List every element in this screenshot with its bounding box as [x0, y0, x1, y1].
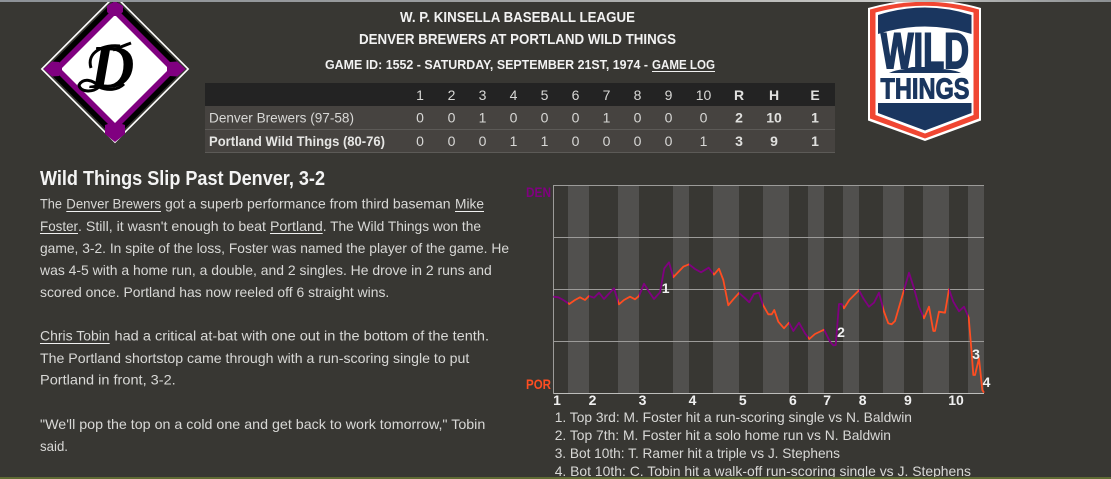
- inning axis labels: 7: [823, 392, 831, 408]
- row: Portland: [209, 133, 819, 149]
- team label: POR: POR: [526, 376, 551, 392]
- header row: 5: [541, 87, 549, 103]
- header row: 4: [510, 87, 518, 103]
- key play markers: 1: [662, 280, 670, 296]
- inning axis labels: 5: [739, 392, 747, 408]
- row: Denver: 0: [665, 110, 673, 126]
- header: matchup: DENVER BREWERS AT PORTLAND WILD THINGS: [359, 32, 676, 48]
- article paragraph 2: had a critical at-bat with one out in the bottom of the tenth.: [114, 328, 489, 344]
- row: Denver: 0: [700, 110, 708, 126]
- row: Portland: 1: [700, 133, 708, 149]
- inning axis labels: 10: [948, 392, 964, 408]
- background grass strip: bottom: [0, 477, 1111, 479]
- win probability line: Denver batting: [553, 262, 984, 393]
- things wordmark: THINGS: [880, 74, 970, 106]
- row: Portland: 9: [770, 133, 778, 149]
- background photo strip: top: [0, 0, 1111, 2]
- article paragraph 1: . The Wild Things won the: [323, 218, 481, 234]
- row: Portland: 0: [448, 133, 456, 149]
- article paragraph 3: said.: [40, 438, 68, 454]
- key plays list: 3. Bot 10th: T. Ramer hit a triple vs J. Stephens: [555, 445, 840, 461]
- article paragraph 2: Portland in front, 3-2.: [40, 372, 176, 388]
- inning axis labels: 6: [789, 392, 797, 408]
- header row: 9: [665, 87, 673, 103]
- header: game id line: GAME LOG: [652, 57, 715, 72]
- key play markers: [662, 280, 991, 390]
- row: Portland: 0: [665, 133, 673, 149]
- header row: 8: [634, 87, 642, 103]
- inning axis labels: 3: [639, 392, 647, 408]
- inning axis labels: 8: [859, 392, 867, 408]
- article paragraph 1: was 4-5 with a home run, a double, and 2 singles. He drove in 2 runs and: [39, 262, 492, 278]
- article paragraph 1: got a superb performance from third baseman: [165, 196, 451, 212]
- article paragraph 3: "We'll pop the top on a cold one and get back to work tomorrow," Tobin: [40, 416, 485, 432]
- article paragraph 1: Mike: [455, 196, 484, 212]
- row: Portland: Portland Wild Things (80-76): [209, 133, 385, 149]
- logo: Denver Brewers diamond: D: [89, 34, 134, 102]
- article headline: Wild Things Slip Past Denver, 3-2: [40, 168, 325, 190]
- row: Denver: 0: [541, 110, 549, 126]
- row: Portland: 0: [416, 133, 424, 149]
- key play markers: 4: [983, 374, 991, 390]
- wild wordmark: WILD: [881, 23, 969, 79]
- row: Portland: 0: [572, 133, 580, 149]
- header row: 6: [572, 87, 580, 103]
- row: Denver: 0: [634, 110, 642, 126]
- key play markers: 3: [972, 346, 980, 362]
- win probability chart: [526, 184, 991, 408]
- logo: Portland Wild Things shield: [868, 0, 981, 141]
- key plays list: [555, 409, 971, 479]
- row: Portland: 1: [510, 133, 518, 149]
- inning bands: [568, 185, 984, 393]
- article paragraph 1: game, 3-2. In spite of the loss, Foster was named the player of the game. He: [40, 240, 509, 256]
- header row: R: [734, 87, 744, 103]
- row: Denver: 0: [572, 110, 580, 126]
- article paragraph 2: [40, 328, 489, 388]
- inning axis labels: 2: [589, 392, 597, 408]
- header: league title: W. P. KINSELLA BASEBALL LEAGUE: [400, 10, 635, 26]
- row: Denver: 0: [448, 110, 456, 126]
- header: game id line: GAME ID: 1552 - SATURDAY, SEPTEMBER 21ST, 1974 -: [325, 57, 648, 72]
- inning axis labels: [553, 392, 964, 408]
- header row: 10: [696, 87, 711, 103]
- header row: 3: [479, 87, 487, 103]
- header row: 2: [448, 87, 456, 103]
- row: Denver: 0: [416, 110, 424, 126]
- header row: E: [810, 87, 820, 103]
- row: Portland: 0: [479, 133, 487, 149]
- inning axis labels: 4: [689, 392, 697, 408]
- article paragraph 1: Foster: [40, 218, 78, 234]
- row: Denver: [209, 110, 819, 126]
- article paragraph 2: The Portland shortstop came through with a run-scoring single to put: [40, 350, 469, 366]
- row: Portland: 0: [634, 133, 642, 149]
- row: Portland: 1: [811, 133, 819, 149]
- article paragraph 1: The: [40, 196, 62, 212]
- row: Denver: 0: [510, 110, 518, 126]
- key play markers: 2: [837, 324, 845, 340]
- header row: [416, 87, 820, 103]
- key plays list: 2. Top 7th: M. Foster hit a solo home run vs N. Baldwin: [555, 427, 891, 443]
- row: Denver: Denver Brewers (97-58): [209, 110, 354, 126]
- header row: 1: [416, 87, 424, 103]
- row: Denver: 1: [811, 110, 819, 126]
- article paragraph 1: scored once. Portland has now reeled off 6 straight wins.: [40, 284, 389, 300]
- article paragraph 3: [40, 416, 485, 454]
- article paragraph 1: Denver Brewers: [66, 196, 161, 212]
- key plays list: 4. Bot 10th: C. Tobin hit a walk-off run-scoring single vs J. Stephens: [555, 463, 971, 479]
- row: Denver: 1: [479, 110, 487, 126]
- row: Denver: 10: [766, 110, 782, 126]
- header row: 7: [603, 87, 611, 103]
- inning axis labels: 9: [904, 392, 912, 408]
- row: Portland: 3: [735, 133, 743, 149]
- logo: Denver Brewers diamond: [41, 0, 189, 143]
- row: Portland: 0: [603, 133, 611, 149]
- header row: H: [769, 87, 779, 103]
- win probability line: Portland batting: [568, 263, 985, 394]
- row: Denver: 1: [603, 110, 611, 126]
- team label: DEN: DEN: [526, 184, 551, 200]
- row: Denver: 2: [735, 110, 743, 126]
- row: Portland: 1: [541, 133, 549, 149]
- inning axis labels: 1: [553, 392, 561, 408]
- article paragraph 1: Portland: [270, 218, 323, 234]
- box score table: [205, 83, 835, 153]
- article paragraph 2: Chris Tobin: [40, 328, 110, 344]
- key plays list: 1. Top 3rd: M. Foster hit a run-scoring single vs N. Baldwin: [555, 409, 912, 425]
- article paragraph 1: . Still, it wasn't enough to beat: [78, 218, 266, 234]
- article paragraph 1: [39, 196, 509, 300]
